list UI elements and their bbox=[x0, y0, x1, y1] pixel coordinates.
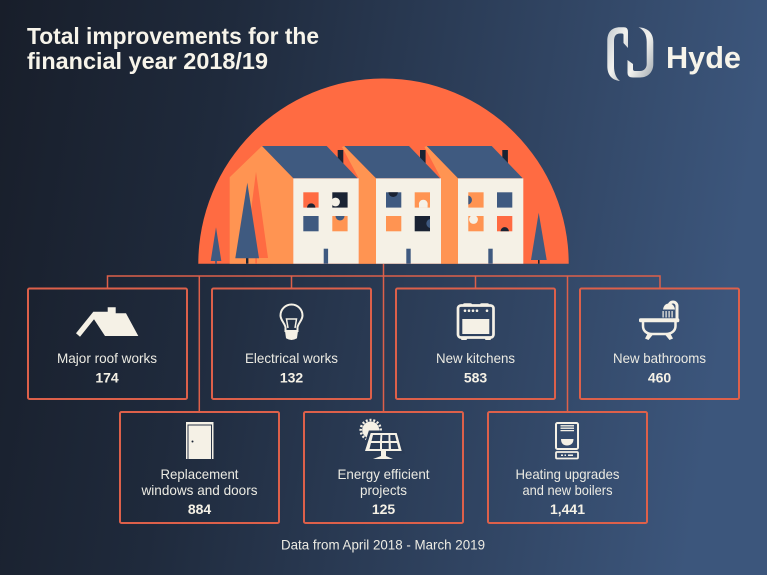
house side walls bbox=[230, 146, 458, 264]
panel: major roof works: Major roof works bbox=[57, 350, 157, 366]
panel: heating upgrades and new boilers: and new boilers bbox=[522, 482, 612, 498]
panel: electrical works bbox=[212, 288, 371, 399]
panel: new kitchens: 583 bbox=[464, 370, 487, 386]
chimneys bbox=[338, 150, 508, 164]
icon: solar panel and sun bbox=[361, 420, 402, 459]
house fronts bbox=[293, 178, 523, 264]
panel: major roof works bbox=[28, 288, 187, 399]
icon: bath with shower bbox=[639, 302, 679, 340]
icon: roof bbox=[76, 307, 138, 337]
panel: energy efficient projects: 125 bbox=[372, 501, 395, 517]
panel: heating upgrades and new boilers: 1,441 bbox=[550, 501, 585, 517]
title bbox=[27, 23, 319, 74]
panel: new bathrooms bbox=[580, 288, 739, 399]
title: financial year 2018/19 bbox=[27, 48, 268, 74]
panel: new kitchens bbox=[396, 288, 555, 399]
roofs bbox=[262, 146, 523, 178]
icon: door bbox=[186, 422, 214, 459]
doors bbox=[324, 249, 493, 264]
trees bbox=[211, 172, 547, 264]
footnote: Data from April 2018 - March 2019 bbox=[281, 536, 485, 552]
panel: major roof works: 174 bbox=[95, 370, 119, 386]
panel: electrical works: Electrical works bbox=[245, 350, 338, 366]
panel: replacement windows and doors: windows and doors bbox=[141, 482, 258, 498]
connector lines bbox=[108, 264, 660, 412]
panel: heating upgrades and new boilers: Heating upgrades bbox=[516, 466, 620, 482]
sun semicircle bbox=[198, 79, 569, 264]
icon: light bulb bbox=[280, 305, 302, 340]
panel: energy efficient projects: Energy efficient bbox=[338, 466, 430, 482]
panel: new bathrooms: New bathrooms bbox=[613, 350, 706, 366]
logo: Hyde bbox=[607, 27, 741, 81]
panel: electrical works: 132 bbox=[280, 370, 303, 386]
panel: heating upgrades and new boilers bbox=[488, 412, 647, 523]
illustration: terraced houses and sun bbox=[198, 79, 569, 264]
panel: replacement windows and doors: Replacement bbox=[160, 466, 239, 482]
panel: replacement windows and doors bbox=[120, 412, 279, 523]
title: Total improvements for the bbox=[27, 23, 319, 49]
logo: Hyde: Hyde bbox=[666, 40, 741, 75]
panel: energy efficient projects: projects bbox=[360, 482, 407, 498]
panel: new bathrooms: 460 bbox=[648, 370, 671, 386]
windows bbox=[303, 192, 512, 231]
panel: new kitchens: New kitchens bbox=[436, 350, 515, 366]
panel: replacement windows and doors: 884 bbox=[188, 501, 211, 517]
icon: boiler bbox=[556, 423, 578, 458]
panel: energy efficient projects bbox=[304, 412, 463, 523]
icon: oven bbox=[458, 303, 494, 340]
